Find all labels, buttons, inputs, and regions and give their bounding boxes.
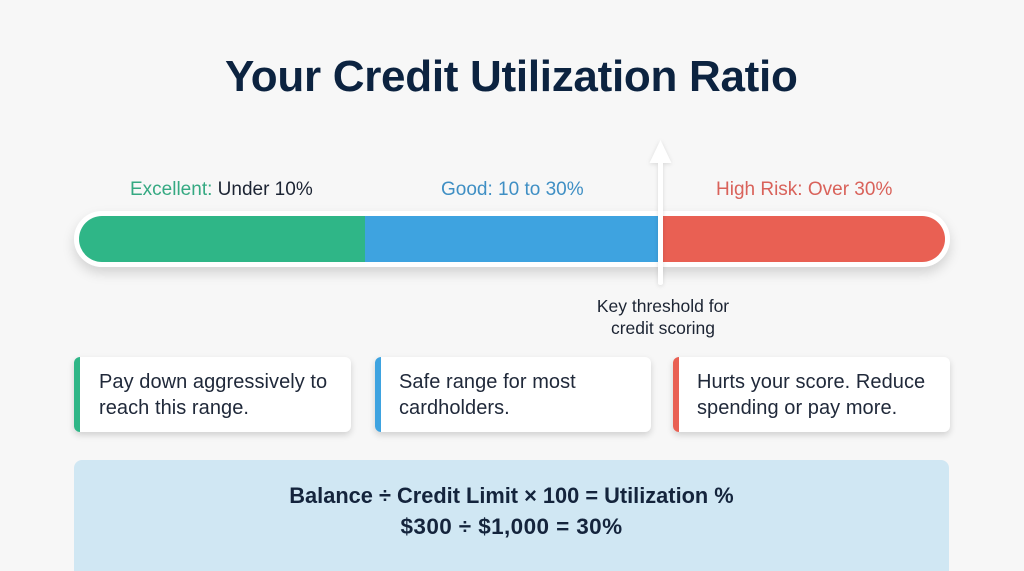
- card: high risk: spending or pay more.: [697, 397, 897, 419]
- arrow: key threshold: [650, 144, 672, 286]
- formula text: $300 ÷ $1,000 = 30%: [400, 514, 622, 539]
- title: Your Credit Utilization Ratio: [225, 52, 798, 101]
- card: good: [375, 357, 651, 432]
- segment: high risk: [660, 216, 945, 262]
- threshold annotation: Key threshold for: [597, 296, 729, 316]
- segment: good: [365, 216, 660, 262]
- formula text: Balance ÷ Credit Limit × 100 = Utilization %: [289, 483, 734, 508]
- label: excellent: Excellent: Under 10%: [130, 179, 313, 200]
- card: excellent: reach this range.: [99, 397, 249, 419]
- formula text: [289, 483, 734, 539]
- formula panel: [74, 460, 949, 571]
- threshold annotation: [597, 296, 729, 338]
- card: excellent: Pay down aggressively to: [99, 371, 327, 393]
- card: good: cardholders.: [399, 397, 510, 419]
- label: good: Good: 10 to 30%: [441, 179, 584, 200]
- card: high risk: Hurts your score. Reduce: [697, 371, 925, 393]
- utilization bar: [74, 211, 950, 267]
- label: high risk: High Risk: Over 30%: [716, 179, 892, 200]
- threshold annotation: credit scoring: [611, 318, 715, 338]
- card: excellent: [74, 357, 351, 432]
- segment: excellent: [79, 216, 365, 262]
- card: high risk: [673, 357, 950, 432]
- card: good: Safe range for most: [399, 371, 576, 393]
